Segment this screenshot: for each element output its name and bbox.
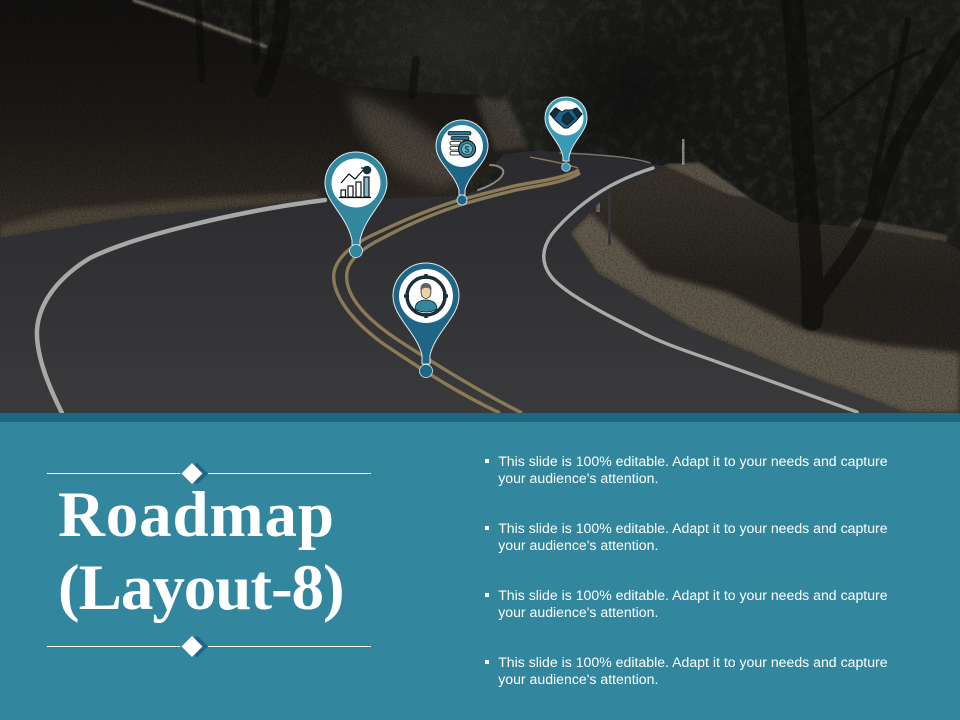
pin: growth chart <box>325 152 387 258</box>
icon: handshake <box>550 108 582 128</box>
text block: bullet 1: This slide is 100% editable. Adapt it to your needs and capture <box>498 453 888 469</box>
top ornament line <box>47 462 371 484</box>
dark teal divider band <box>0 413 960 422</box>
title: (Layout-8) <box>58 552 344 624</box>
panel: title area <box>47 462 371 658</box>
title: Roadmap <box>58 479 335 551</box>
text block: bullet 3: your audience's attention. <box>498 604 658 620</box>
forest background <box>0 0 960 413</box>
pin: coins <box>436 120 488 205</box>
icon: coin stack: $ <box>464 144 470 154</box>
text block: bullet 3: This slide is 100% editable. Adapt it to your needs and capture <box>498 587 888 603</box>
text block: bullet 3 <box>485 587 888 620</box>
text block: bullet 4: This slide is 100% editable. Adapt it to your needs and capture <box>498 654 888 670</box>
road photograph scene <box>0 0 960 413</box>
text block: bullet 2: your audience's attention. <box>498 537 658 553</box>
fine grain texture <box>0 0 960 413</box>
left hillside <box>0 0 535 238</box>
text block: bullet 2: This slide is 100% editable. Adapt it to your needs and capture <box>498 520 888 536</box>
pin: handshake <box>545 97 587 171</box>
road edge lines <box>37 153 857 413</box>
pin: person target <box>393 263 459 378</box>
title <box>58 479 344 624</box>
double yellow centre line <box>334 157 580 413</box>
icon: person in target <box>404 274 448 318</box>
text block: bullet 1: your audience's attention. <box>498 470 658 486</box>
text block: bullet 1 <box>485 453 888 486</box>
asphalt road <box>0 151 907 413</box>
roadside posts <box>596 139 684 245</box>
icon: bar chart <box>339 168 371 198</box>
right mound and grass verge <box>570 162 960 413</box>
text block: bullet 4: your audience's attention. <box>498 671 658 687</box>
text block: bullet 2 <box>485 520 888 553</box>
text block: bullet 4 <box>485 654 888 687</box>
bottom ornament line <box>47 636 371 658</box>
dark trees <box>198 0 960 320</box>
